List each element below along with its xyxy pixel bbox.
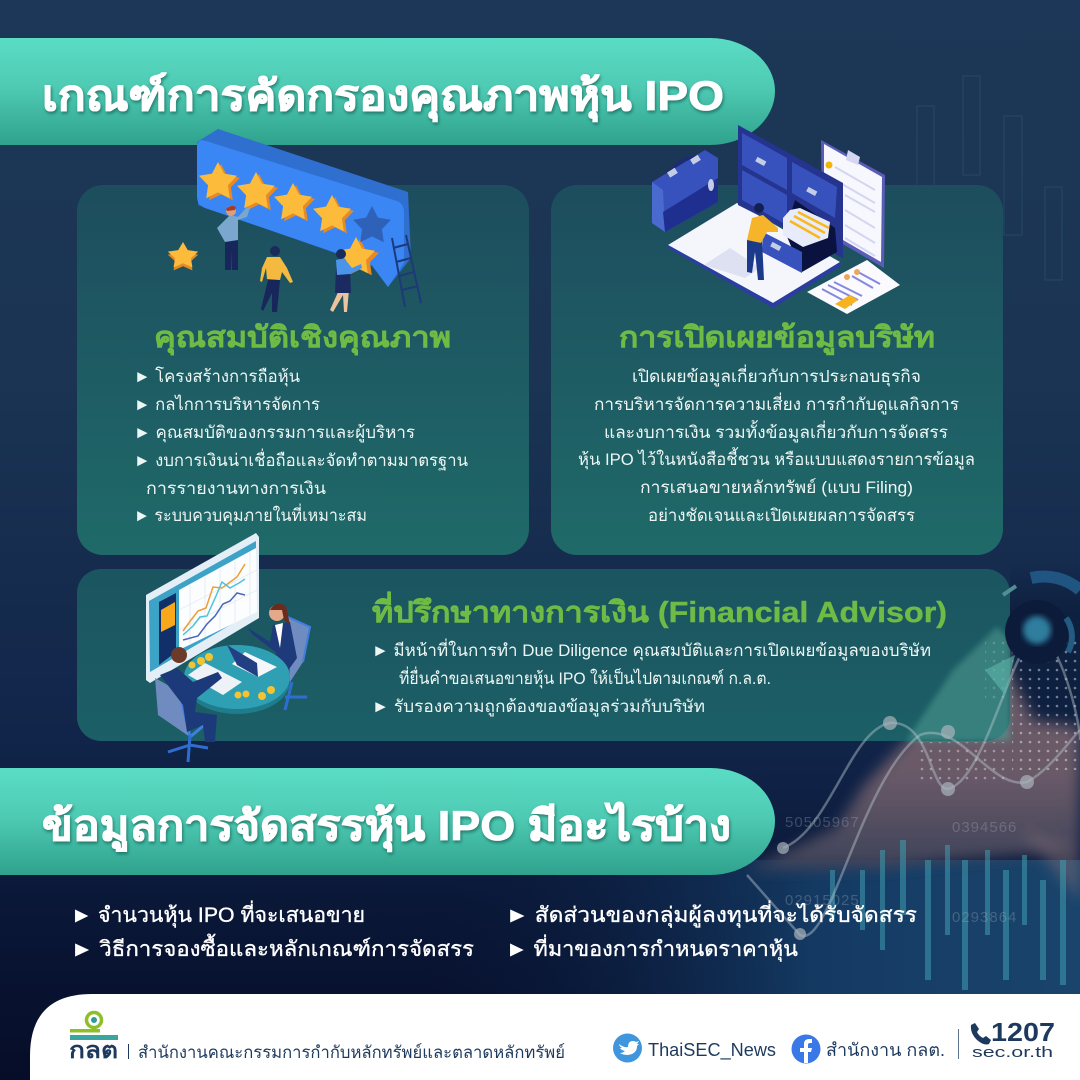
title: ข้อมูลการจัดสรรหุ้น IPO มีอะไรบ้าง bbox=[42, 801, 731, 852]
list: qualifications: ► โครงสร้างการถือหุ้น bbox=[134, 366, 300, 387]
contact: hotline and website: 1207 bbox=[991, 1017, 1055, 1047]
left chair and man bbox=[155, 647, 222, 762]
facebook name: สำนักงาน กลต. bbox=[826, 1040, 945, 1060]
text block: disclosure description: การบริหารจัดการความเสี่ยง การกำกับดูแลกิจการ bbox=[594, 392, 959, 415]
twitter handle: ThaiSEC_News bbox=[648, 1040, 776, 1061]
background: hand and market chart photo: 0394566 bbox=[952, 819, 1017, 836]
contact: hotline and website bbox=[971, 1017, 1055, 1061]
list: qualifications bbox=[134, 366, 468, 526]
icon: facebook bbox=[792, 1034, 820, 1064]
laptop base bbox=[668, 203, 840, 303]
text block: disclosure description: และงบการเงิน รวมทั้งข้อมูลเกี่ยวกับการจัดสรร bbox=[604, 420, 948, 443]
list: qualifications: การรายงานทางการเงิน bbox=[146, 479, 326, 498]
illustration: filing cabinet and documents bbox=[652, 125, 900, 314]
text block: disclosure description: การเสนอขายหลักทรัพย์ (แบบ Filing) bbox=[640, 478, 913, 497]
monitor bbox=[146, 533, 259, 683]
chart lines and rings over panel bbox=[747, 576, 1080, 940]
heading: qualitative qualifications: คุณสมบัติเชิงคุณภาพ bbox=[154, 322, 451, 355]
logo: SEC Thailand: กลต bbox=[69, 1037, 118, 1063]
organisation name: สำนักงานคณะกรรมการกำกับหลักทรัพย์และตลาดหลักทรัพย์ bbox=[138, 1043, 565, 1062]
heading: company disclosure: การเปิดเผยข้อมูลบริษัท bbox=[619, 322, 935, 355]
heading: financial advisor: ที่ปรึกษาทางการเงิน (Financial Advisor) bbox=[372, 591, 947, 629]
list: qualifications: ► งบการเงินน่าเชื่อถือและจัดทำตามมาตรฐาน bbox=[134, 448, 468, 471]
heading banner: screening criteria bbox=[0, 38, 775, 145]
text block: disclosure description: เปิดเผยข้อมูลเกี่ยวกับการประกอบธุรกิจ bbox=[632, 364, 921, 387]
right chair and woman bbox=[248, 604, 310, 710]
panel: financial advisor bbox=[77, 569, 1010, 741]
contact: hotline and website: sec.or.th bbox=[972, 1044, 1053, 1061]
text block: disclosure description: อย่างชัดเจนและเปิดเผยผลการจัดสรร bbox=[648, 506, 915, 525]
background: hand and market chart photo: 02915025 bbox=[785, 892, 860, 909]
heading banner: allocation information bbox=[0, 768, 775, 875]
list: financial advisor duties bbox=[372, 638, 931, 717]
person reaching up bbox=[217, 206, 250, 270]
list: financial advisor duties: ► รับรองความถูกต้องของข้อมูลร่วมกับบริษัท bbox=[372, 697, 705, 717]
illustration: advisors at table with chart monitor bbox=[146, 533, 310, 762]
list: qualifications: ► ระบบควบคุมภายในที่เหมาะสม bbox=[134, 503, 367, 526]
clipboard bbox=[821, 140, 885, 268]
panel: qualitative qualifications bbox=[77, 185, 529, 555]
list: allocation information: ► จำนวนหุ้น IPO ที่จะเสนอขาย bbox=[71, 900, 365, 928]
table bbox=[184, 648, 290, 714]
cabinet bbox=[738, 125, 843, 273]
list: financial advisor duties: ► มีหน้าที่ในการทำ Due Diligence คุณสมบัติและการเปิดเผยข้อมูลของบริษัท bbox=[372, 638, 931, 661]
person in yellow bbox=[260, 246, 293, 312]
person at cabinet bbox=[747, 203, 778, 280]
briefcase bbox=[652, 150, 718, 232]
text block: disclosure description bbox=[578, 364, 975, 525]
text block: disclosure description: หุ้น IPO ไว้ในหนังสือชี้ชวน หรือแบบแสดงรายการข้อมูล bbox=[578, 447, 975, 470]
list: allocation information bbox=[71, 900, 917, 962]
list: financial advisor duties: ที่ยื่นคำขอเสนอขายหุ้น IPO ให้เป็นไปตามเกณฑ์ ก.ล.ต. bbox=[399, 666, 771, 689]
paper sheet bbox=[807, 260, 900, 314]
title: เกณฑ์การคัดกรองคุณภาพหุ้น IPO bbox=[42, 72, 724, 122]
footer bbox=[30, 994, 1080, 1080]
person holding star bbox=[330, 249, 362, 312]
logo: SEC Thailand bbox=[69, 1012, 118, 1063]
background: hand and market chart photo: 50505967 bbox=[785, 814, 860, 831]
icon: twitter bbox=[613, 1034, 642, 1062]
list: allocation information: ► สัดส่วนของกลุ่มผู้ลงทุนที่จะได้รับจัดสรร bbox=[506, 900, 917, 928]
list: qualifications: ► คุณสมบัติของกรรมการและผู้บริหาร bbox=[134, 423, 415, 443]
list: qualifications: ► กลไกการบริหารจัดการ bbox=[134, 394, 320, 414]
ladder bbox=[392, 235, 421, 307]
list: allocation information: ► ที่มาของการกำหนดราคาหุ้น bbox=[506, 934, 798, 962]
panel: company disclosure bbox=[551, 185, 1003, 555]
illustration: review stars and people bbox=[168, 129, 421, 312]
list: allocation information: ► วิธีการจองซื้อและหลักเกณฑ์การจัดสรร bbox=[71, 934, 474, 961]
background: hand and market chart photo bbox=[747, 560, 1080, 990]
background: hand and market chart photo: 0293864 bbox=[952, 909, 1017, 926]
